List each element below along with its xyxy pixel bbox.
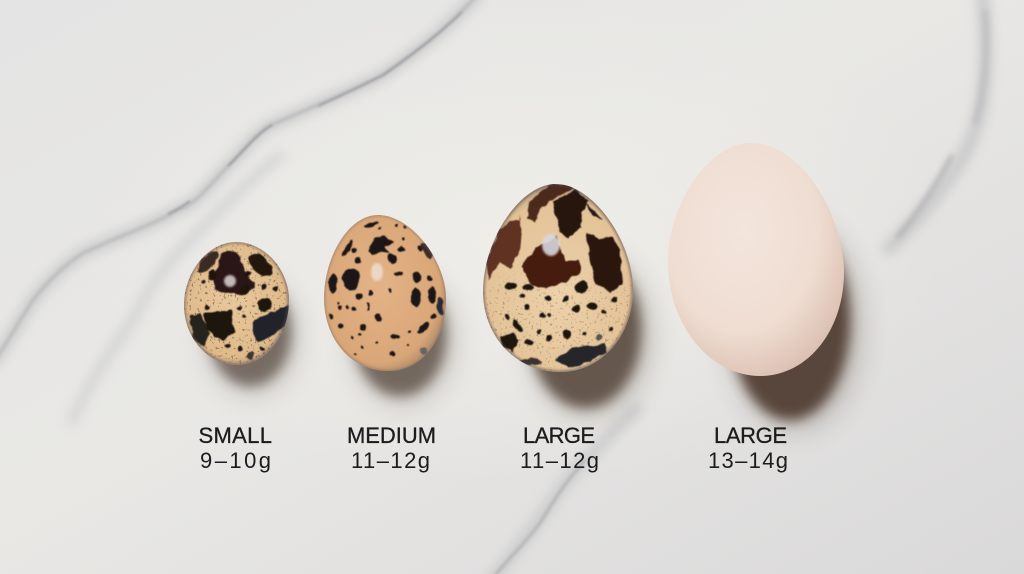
label: large 11–12g: 11–12g xyxy=(520,448,599,473)
label: large 11–12g xyxy=(520,423,599,473)
label: medium 11–12g: MEDIUM xyxy=(347,423,436,448)
label: small 9–10g: 9–10g xyxy=(200,448,271,473)
label: medium 11–12g: 11–12g xyxy=(351,448,430,473)
label: large 11–12g: LARGE xyxy=(523,423,595,448)
label: small 9–10g xyxy=(198,423,272,473)
label: large 13–14g: 13–14g xyxy=(708,448,788,473)
label: large 13–14g: LARGE xyxy=(714,423,787,448)
egg: large chicken xyxy=(668,143,844,376)
egg shadows xyxy=(208,220,861,429)
label: large 13–14g xyxy=(708,423,788,473)
egg: small quail xyxy=(180,240,292,368)
egg: large quail xyxy=(480,184,636,374)
egg: medium quail xyxy=(324,215,446,371)
label: small 9–10g: SMALL xyxy=(198,423,272,448)
label: medium 11–12g xyxy=(347,423,436,473)
